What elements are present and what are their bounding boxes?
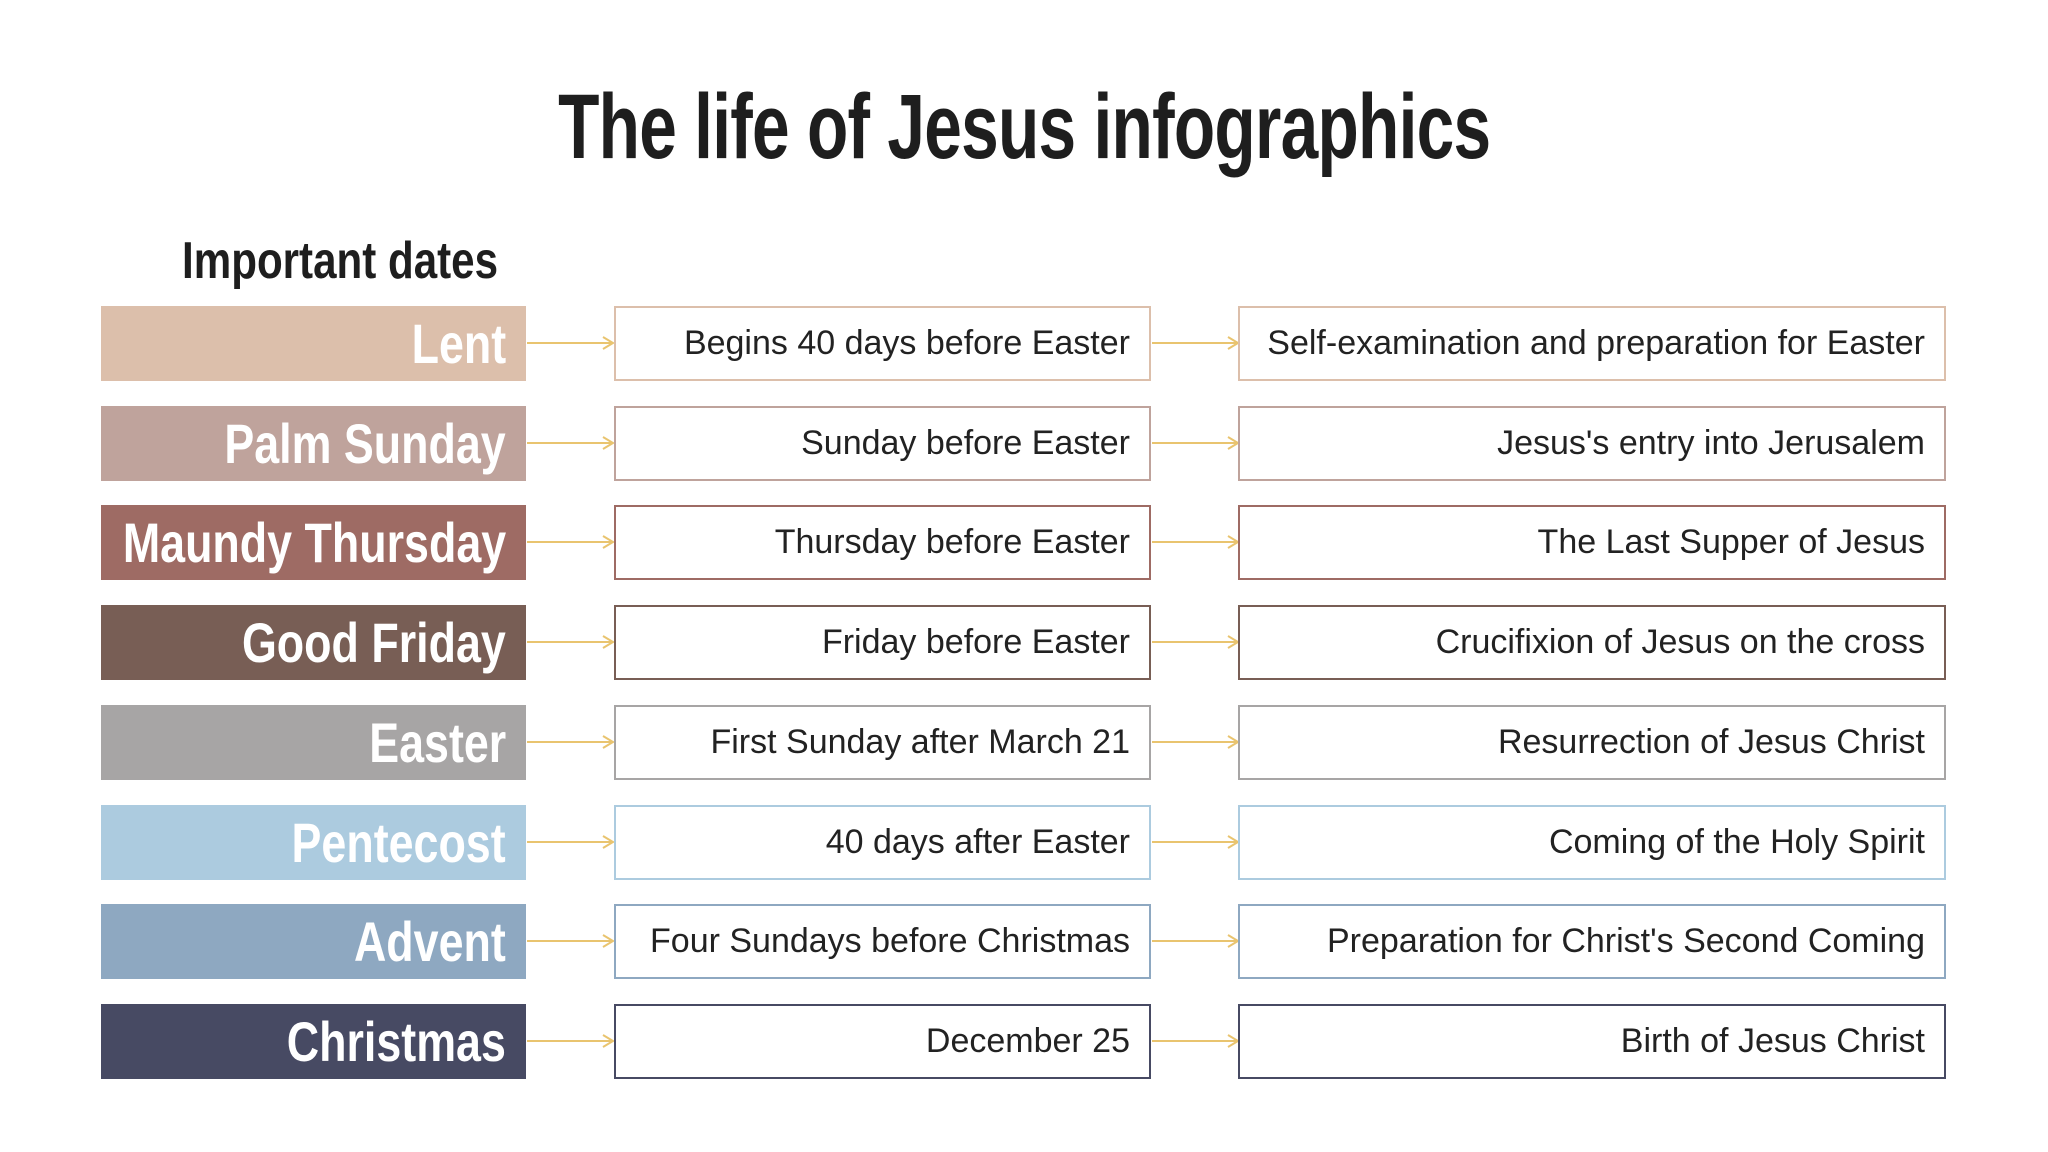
row: Good Friday: Good Friday [242, 611, 506, 674]
row: Lent: Begins 40 days before Easter [684, 324, 1130, 362]
row: Maundy Thursday: Maundy Thursday [123, 511, 506, 574]
row: Pentecost [101, 805, 1946, 880]
row: Easter: First Sunday after March 21 [710, 723, 1130, 761]
row: Pentecost: Coming of the Holy Spirit [1549, 823, 1925, 861]
row: Advent: Four Sundays before Christmas [650, 922, 1130, 960]
row: Christmas [101, 1004, 1946, 1079]
row: Pentecost: 40 days after Easter [826, 823, 1130, 861]
row: Easter: Resurrection of Jesus Christ [1498, 723, 1925, 761]
row: Maundy Thursday: Thursday before Easter [775, 523, 1130, 561]
row: Maundy Thursday: The Last Supper of Jesus [1538, 523, 1925, 561]
title: The life of Jesus infographics [558, 76, 1490, 178]
row: Advent: Preparation for Christ's Second Coming [1327, 922, 1925, 960]
row: Pentecost: Pentecost [292, 811, 506, 874]
row: Christmas: Christmas [287, 1010, 506, 1073]
row: Palm Sunday [101, 406, 1946, 481]
row: Lent: Lent [411, 312, 506, 375]
row: Easter [101, 705, 1946, 780]
row: Lent: Self-examination and preparation for Easter [1267, 324, 1925, 362]
subtitle: Important dates: Important dates [182, 232, 498, 290]
row: Good Friday: Crucifixion of Jesus on the cross [1436, 623, 1925, 661]
row: Maundy Thursday [101, 505, 1946, 580]
row: Advent [101, 904, 1946, 979]
row: Palm Sunday: Palm Sunday [225, 412, 506, 475]
row: Good Friday: Friday before Easter [822, 623, 1130, 661]
row: Advent: Advent [354, 910, 506, 973]
row: Lent [101, 306, 1946, 381]
row: Palm Sunday: Sunday before Easter [801, 424, 1130, 462]
row: Palm Sunday: Jesus's entry into Jerusalem [1497, 424, 1925, 462]
row: Easter: Easter [369, 711, 506, 774]
row: Christmas: December 25 [926, 1022, 1130, 1060]
row: Good Friday [101, 605, 1946, 680]
row: Christmas: Birth of Jesus Christ [1621, 1022, 1925, 1060]
